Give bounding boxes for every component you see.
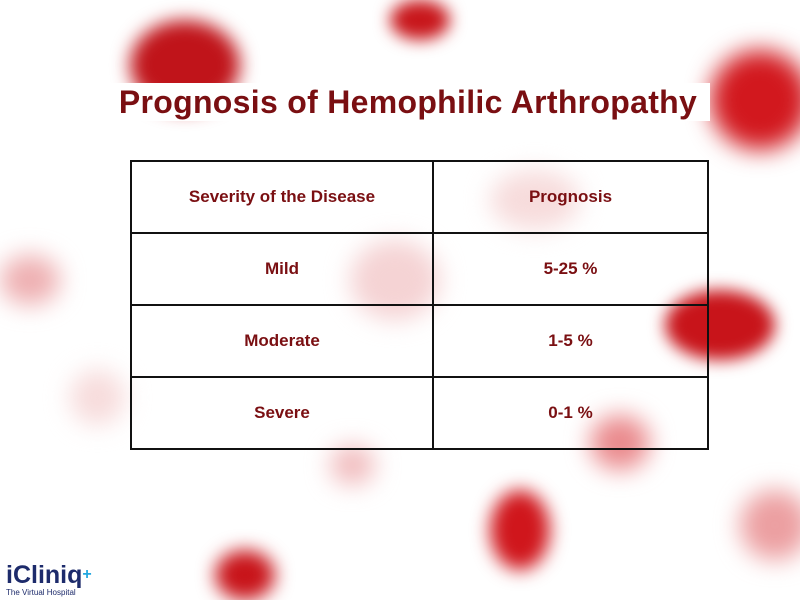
table: 5-25 %	[544, 259, 597, 278]
table: 1-5 %	[548, 331, 593, 350]
table	[130, 160, 709, 450]
logo: The Virtual Hospital	[6, 588, 76, 597]
table: 0-1 %	[548, 403, 593, 422]
logo: iCliniq+	[6, 561, 92, 589]
table: Severity of the Disease	[189, 187, 375, 206]
title: Prognosis of Hemophilic Arthropathy	[119, 84, 697, 120]
table: Severe	[254, 403, 310, 422]
table: Mild	[265, 259, 299, 278]
table: Moderate	[244, 331, 320, 350]
table: Prognosis	[529, 187, 612, 206]
